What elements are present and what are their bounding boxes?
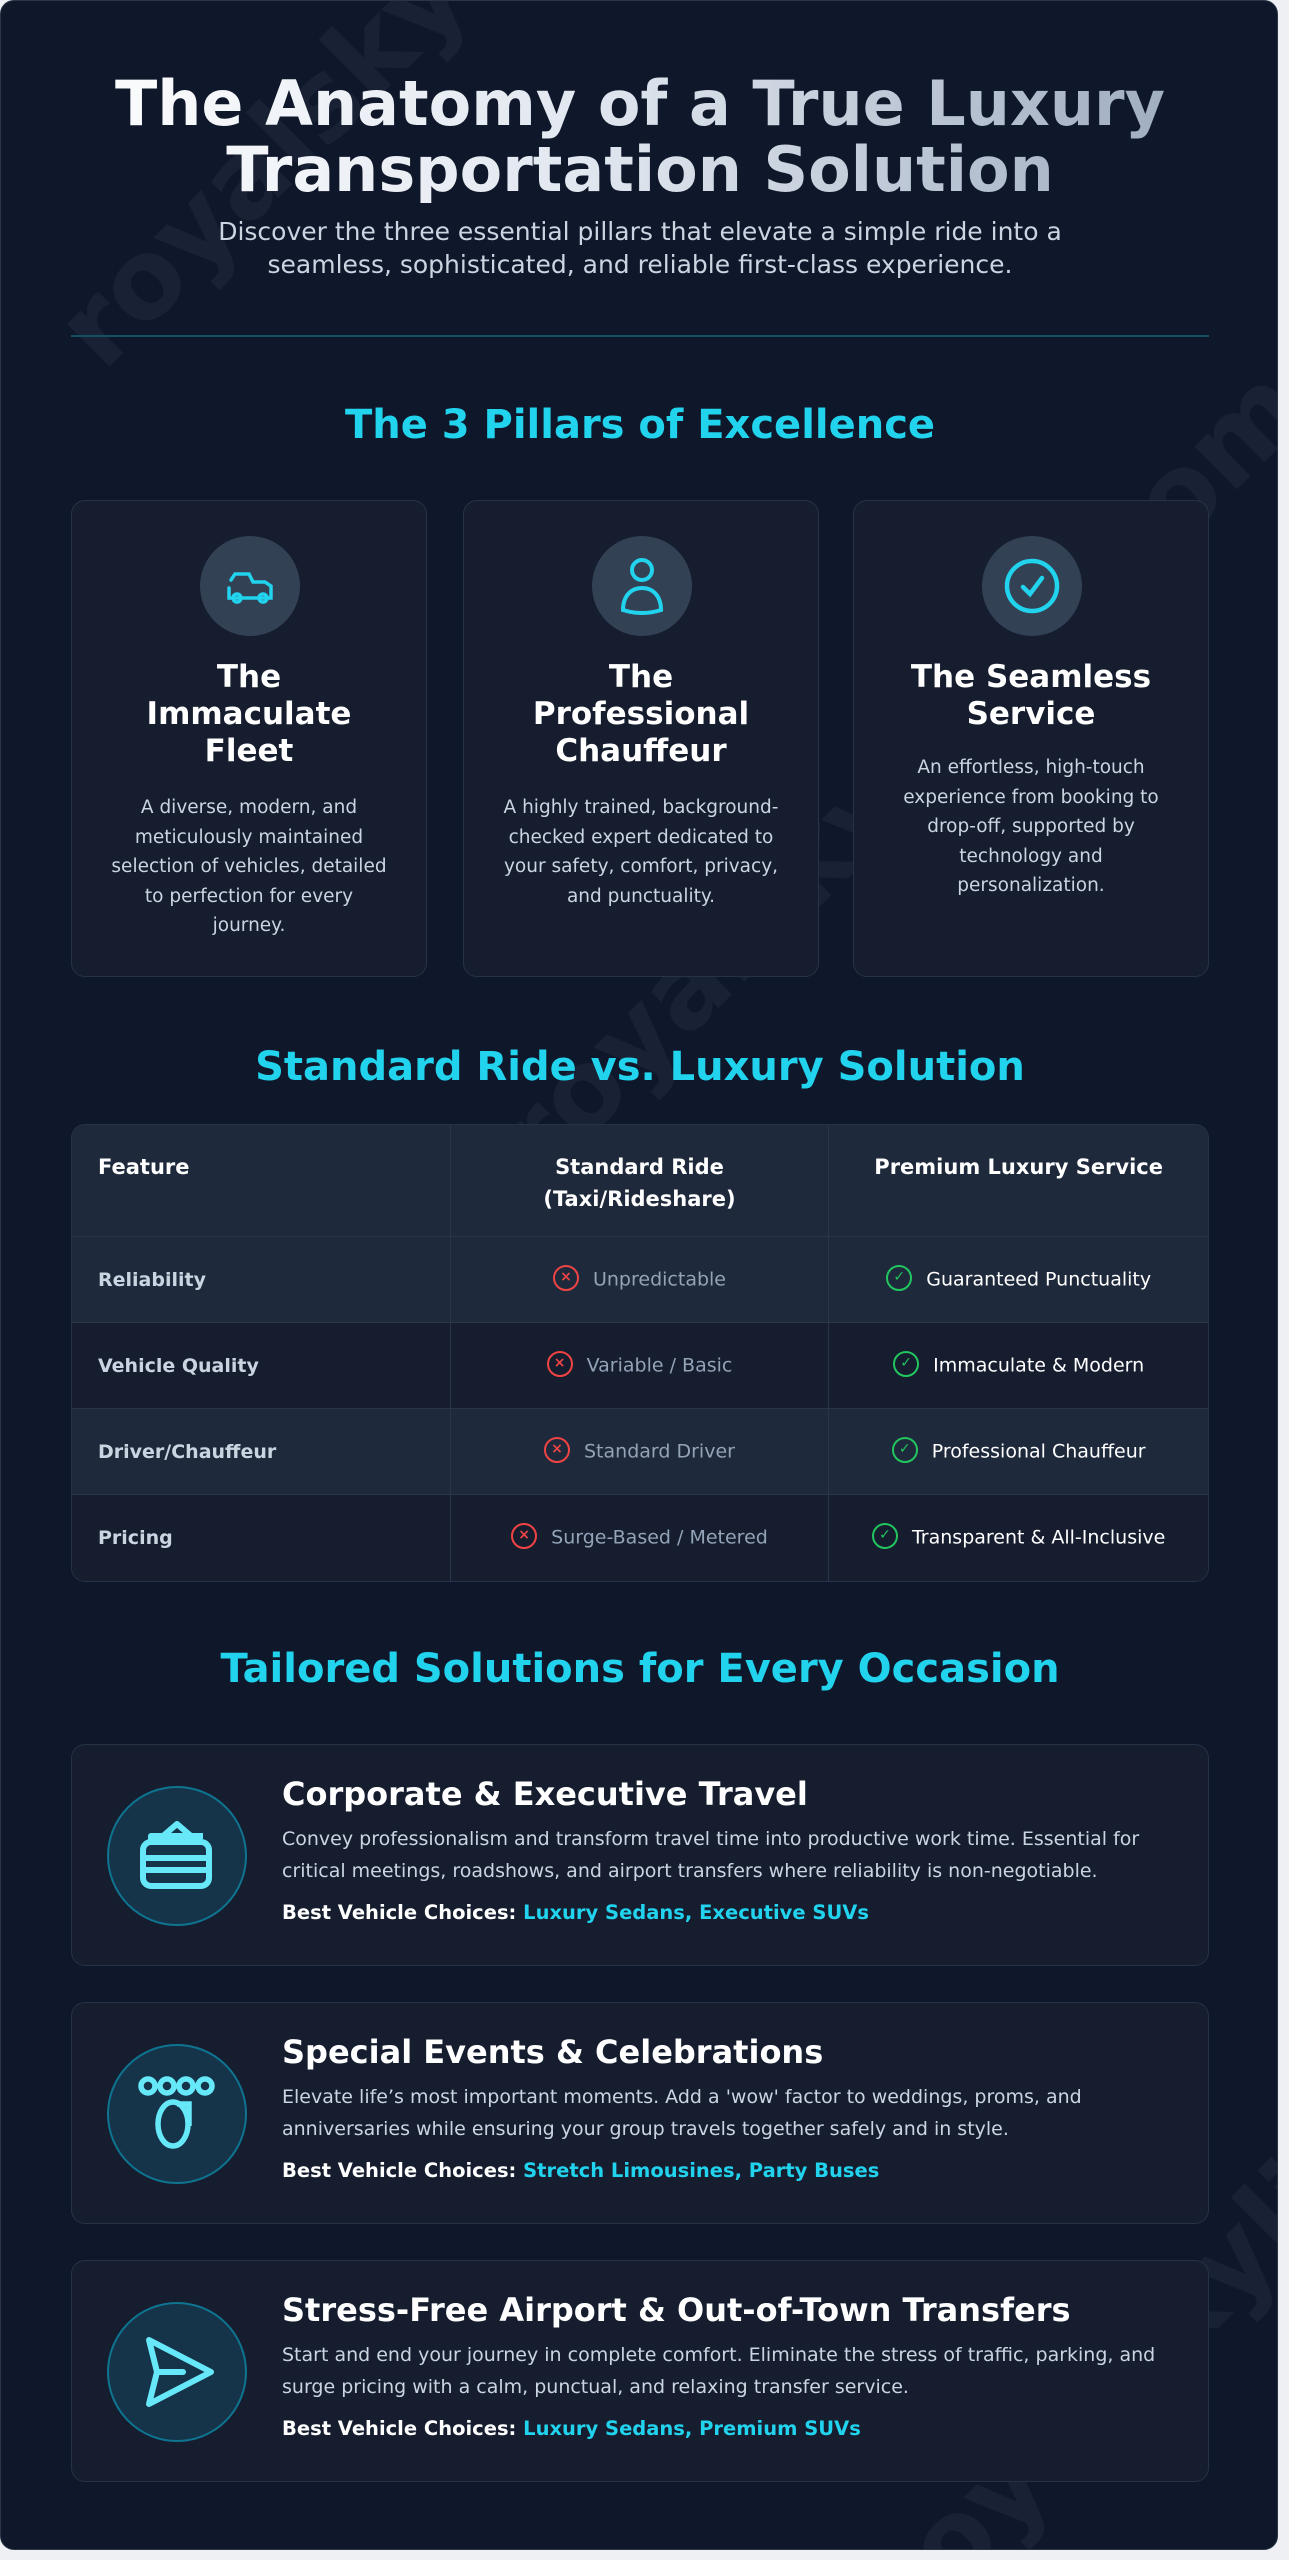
- text: Elevate life’s most important moments. Add a 'wow' factor to weddings, proms, and anniversaries while ensuring your group travels together safely and in style.: [282, 2086, 1082, 2140]
- card title: [533, 659, 749, 769]
- comparison table: Guaranteed Punctuality: [926, 1268, 1151, 1290]
- heading: occasions: Tailored Solutions for Every Occasion: [220, 1646, 1060, 1692]
- panel: events: [71, 2002, 1209, 2224]
- card title: The: [609, 659, 673, 695]
- vehicles: Best Vehicle Choices: Luxury Sedans, Executive SUVs: [282, 1901, 869, 1924]
- comparison table: ✓: [893, 1268, 905, 1284]
- card title: Professional: [533, 696, 749, 732]
- title: The Anatomy of a True Luxury: [115, 67, 1165, 140]
- comparison table: Immaculate & Modern: [933, 1354, 1144, 1376]
- title: Corporate & Executive Travel: [282, 1775, 808, 1813]
- comparison table: Reliability: [98, 1268, 206, 1290]
- card title: Fleet: [205, 733, 293, 769]
- icon: person: [592, 536, 692, 636]
- comparison table: Unpredictable: [593, 1268, 726, 1290]
- text: Start and end your journey in complete comfort. Eliminate the stress of traffic, parking, and surge pricing with a calm, punctual, and relaxing transfer service.: [282, 2344, 1155, 2398]
- card title: The: [217, 659, 281, 695]
- panel: service: [853, 500, 1209, 977]
- card text: An effortless, high-touch experience from booking to drop-off, supported by technology and personalization.: [903, 757, 1159, 896]
- card text: A diverse, modern, and meticulously maintained selection of vehicles, detailed to perfection for every journey.: [111, 797, 387, 936]
- vehicles: Best Vehicle Choices: Stretch Limousines, Party Buses: [282, 2159, 879, 2182]
- card title: Immaculate: [147, 696, 351, 732]
- icon: paper plane: [107, 2302, 247, 2442]
- heading: pillars: The 3 Pillars of Excellence: [345, 402, 935, 448]
- comparison table: Standard Ride: [555, 1155, 724, 1179]
- title: Stress-Free Airport & Out-of-Town Transfers: [282, 2291, 1071, 2329]
- comparison table: Variable / Basic: [587, 1354, 732, 1376]
- card title: Service: [967, 696, 1095, 732]
- panel: chauffeur: [463, 500, 819, 977]
- comparison table: Professional Chauffeur: [932, 1440, 1146, 1462]
- title: Special Events & Celebrations: [282, 2033, 823, 2071]
- comparison table: ×: [554, 1354, 565, 1370]
- icon: car: [200, 536, 300, 636]
- subtitle: Discover the three essential pillars that elevate a simple ride into a: [218, 217, 1062, 246]
- card title: [911, 659, 1151, 732]
- panel: fleet: [71, 500, 427, 977]
- card title: [147, 659, 351, 769]
- comparison table: ✓: [900, 1354, 912, 1370]
- title: [1, 71, 1279, 203]
- comparison table: Surge-Based / Metered: [551, 1526, 768, 1548]
- comparison table: Standard Driver: [584, 1440, 735, 1462]
- icon: briefcase: [107, 1786, 247, 1926]
- comparison table: (Taxi/Rideshare): [543, 1187, 736, 1211]
- card text: A highly trained, background-checked expert dedicated to your safety, comfort, privacy, and punctuality.: [504, 797, 778, 906]
- text: Convey professionalism and transform travel time into productive work time. Essential for critical meetings, roadshows, and airport transfers where reliability is non-negotiable.: [282, 1828, 1139, 1882]
- subtitle: seamless, sophisticated, and reliable first-class experience.: [268, 250, 1012, 279]
- comparison table: ×: [551, 1440, 563, 1456]
- title: Transportation Solution: [226, 133, 1054, 206]
- vehicles: Best Vehicle Choices: Luxury Sedans, Premium SUVs: [282, 2417, 861, 2440]
- panel: airport: [71, 2260, 1209, 2482]
- icon: check: [982, 536, 1082, 636]
- comparison table: Driver/Chauffeur: [98, 1440, 276, 1462]
- icon: celebration: [107, 2044, 247, 2184]
- card title: Chauffeur: [555, 733, 727, 769]
- panel: corporate: [71, 1744, 1209, 1966]
- comparison table: Premium Luxury Service: [874, 1155, 1163, 1179]
- comparison table: Pricing: [98, 1527, 173, 1549]
- comparison table: ×: [560, 1268, 572, 1284]
- comparison table: ✓: [879, 1527, 891, 1543]
- subtitle: [218, 217, 1062, 279]
- comparison table: ✓: [899, 1440, 911, 1456]
- comparison table: Transparent & All-Inclusive: [912, 1526, 1165, 1548]
- heading: comparison: Standard Ride vs. Luxury Solution: [255, 1044, 1025, 1090]
- comparison table: ×: [518, 1527, 530, 1543]
- comparison table: [71, 1124, 1209, 1582]
- comparison table: Vehicle Quality: [98, 1354, 259, 1376]
- comparison table: Feature: [98, 1155, 190, 1179]
- card title: The Seamless: [911, 659, 1151, 695]
